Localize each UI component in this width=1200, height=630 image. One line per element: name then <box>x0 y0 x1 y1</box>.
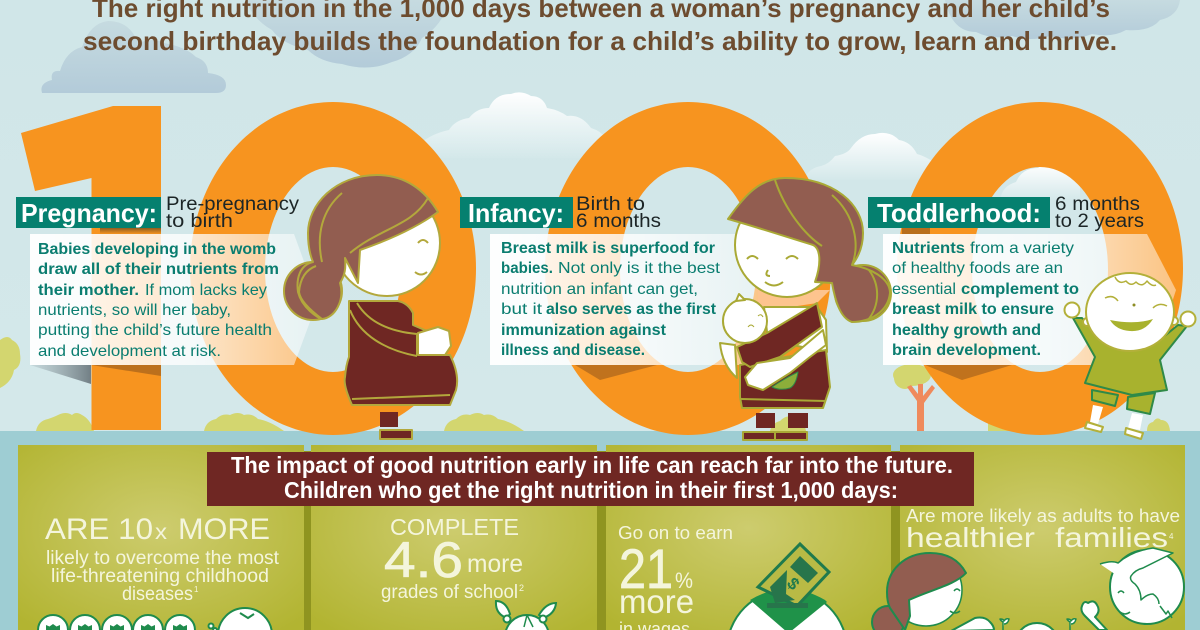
heading <box>83 0 1117 56</box>
illustration: mother with infant <box>720 178 891 440</box>
banner: impact of good nutrition: Children who get the right nutrition in their first 1,000 days: <box>284 477 898 503</box>
stat: 4.6 more grades <box>381 514 524 603</box>
panel: pregnancy: draw all of their nutrients from <box>38 261 279 278</box>
panel: infancy: Breast milk is superfood for <box>501 240 715 257</box>
panel: toddlerhood: to 2 years <box>1055 211 1144 232</box>
panel: infancy: Infancy: <box>468 198 564 228</box>
stat: healthier families <box>906 506 1180 553</box>
big number 1000 <box>21 102 1183 435</box>
stat: 10x more likely <box>45 513 280 605</box>
panel: infancy: immunization against <box>501 322 667 339</box>
panel: infancy: 6 months <box>576 211 661 232</box>
panel: infancy: nutrition an infant can get, <box>501 281 698 298</box>
panel: pregnancy: and development at risk. <box>38 343 221 360</box>
panel: pregnancy: putting the child’s future health <box>38 322 272 339</box>
white clouds <box>415 92 1080 200</box>
icon: child head <box>208 608 272 630</box>
stat: 21% more in wages: more <box>619 583 694 620</box>
stat: healthier families: families <box>1055 522 1168 553</box>
stat: 10x more likely: x <box>155 521 168 544</box>
stat: 4.6 more grades: 4.6 <box>384 532 463 588</box>
panel: toddlerhood: of healthy foods are an <box>892 260 1063 277</box>
stat: 4.6 more grades: more <box>467 550 523 578</box>
stat: 10x more likely: MORE <box>178 513 270 546</box>
icon: healthy family <box>872 548 1184 630</box>
tree trunk <box>907 384 935 431</box>
panel: infancy <box>460 194 765 380</box>
stat: 4.6 more grades: COMPLETE <box>390 514 519 540</box>
panel: pregnancy: Pregnancy: <box>21 198 157 228</box>
icon: graduate with banknote <box>727 544 847 630</box>
panel: infancy: Not only is it the best <box>558 260 721 277</box>
heading: second birthday builds the foundation for a child’s ability to grow, learn and thrive. <box>83 26 1117 56</box>
banner: impact of good nutrition: The impact of good nutrition early in life can reach far into the future. <box>231 452 953 478</box>
stat: healthier families: Are more likely as adults to have <box>906 506 1180 526</box>
panel: pregnancy: If mom lacks key <box>145 282 267 299</box>
panel: pregnancy <box>16 194 318 384</box>
panel: pregnancy: their mother. <box>38 282 139 299</box>
stat: 10x more likely: ARE 10 <box>45 513 153 546</box>
panel: toddlerhood <box>868 194 1176 380</box>
panel: pregnancy: Pre-pregnancy <box>166 194 300 215</box>
stat: 4.6 more grades: grades of school <box>381 582 518 603</box>
illustration: toddler <box>1064 273 1196 439</box>
blue-grey clouds <box>41 0 1180 93</box>
panel: infancy: Birth to <box>576 194 645 215</box>
panel: infancy: but it <box>501 301 543 318</box>
stat: 4.6 more grades: 2 <box>519 583 524 593</box>
stat: 10x more likely: likely to overcome the most <box>46 548 280 569</box>
panel: toddlerhood: 6 months <box>1055 194 1140 215</box>
stat: 10x more likely: 1 <box>194 585 199 594</box>
panel: infancy: also serves as the first <box>546 301 717 318</box>
panel: toddlerhood: Toddlerhood: <box>877 198 1041 228</box>
panel: toddlerhood: essential <box>892 281 956 298</box>
panel: pregnancy: to birth <box>166 211 233 232</box>
icon: shields in circles <box>38 615 195 630</box>
panel: toddlerhood: healthy growth and <box>892 322 1041 339</box>
stat: 21% more in wages: 21 <box>619 537 673 600</box>
stat: healthier families: 4 <box>1169 532 1174 541</box>
panel: toddlerhood: Nutrients <box>892 240 965 257</box>
icon: girl head <box>496 601 556 630</box>
banner: impact of good nutrition <box>207 452 974 506</box>
stat: 21% more in wages <box>618 523 733 630</box>
stat: 10x more likely: life-threatening childhood <box>51 566 269 587</box>
panel: toddlerhood: brain development. <box>892 342 1041 359</box>
panel: pregnancy: Babies developing in the womb <box>38 241 276 258</box>
bushes and trees <box>0 337 1170 431</box>
stat: 21% more in wages: % <box>675 568 693 593</box>
panel: infancy: illness and disease. <box>501 342 645 359</box>
illustration: pregnant mother <box>284 175 457 439</box>
panel: toddlerhood: complement to <box>961 281 1079 298</box>
icon: graduate with banknote: $ <box>783 574 804 594</box>
panel: toddlerhood: from a variety <box>970 240 1074 257</box>
stat: healthier families: healthier <box>906 522 1035 553</box>
panel: infancy: babies. <box>501 260 553 277</box>
stat: 21% more in wages: Go on to earn <box>618 523 733 543</box>
panel: toddlerhood: breast milk to ensure <box>892 301 1054 318</box>
panel: pregnancy: nutrients, so will her baby, <box>38 302 231 319</box>
panel backgrounds: impact section <box>18 445 1185 630</box>
sky background <box>0 0 1200 431</box>
stat: 10x more likely: diseases <box>122 584 193 605</box>
ground band <box>0 431 1200 630</box>
